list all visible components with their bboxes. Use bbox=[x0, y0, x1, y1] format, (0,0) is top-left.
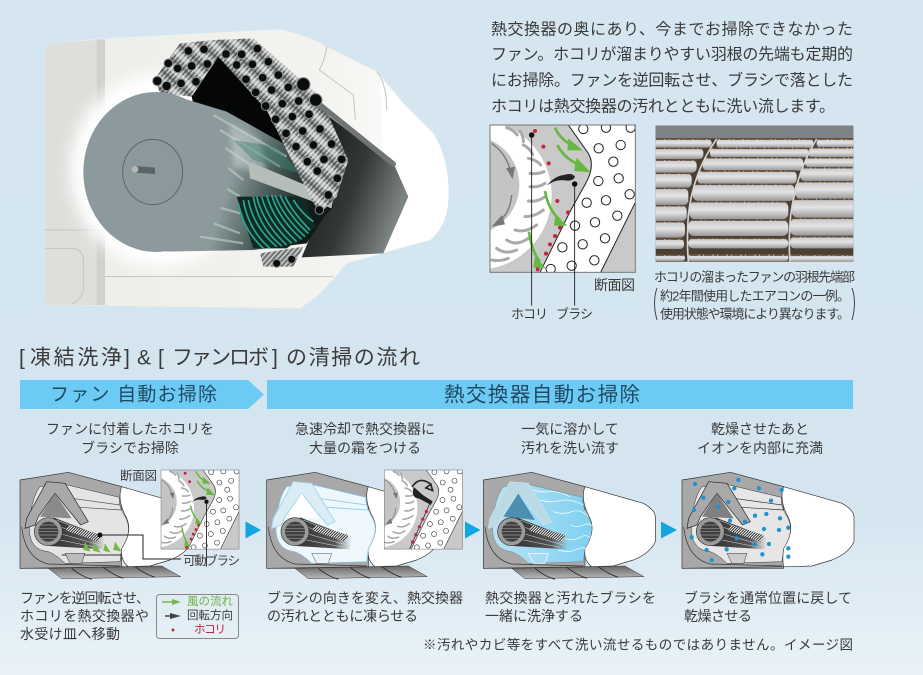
step headings: 大量の霜をつける bbox=[309, 440, 421, 456]
description text: ホコリは熱交換器の汚れとともに洗い流します。 bbox=[491, 98, 835, 116]
description text bbox=[491, 20, 853, 116]
banner: heat exchanger auto cleaning bbox=[267, 380, 853, 409]
step captions: ホコリを熱交換器や bbox=[20, 608, 149, 624]
section title: ] bbox=[272, 346, 278, 370]
step 1 labels and leader bbox=[98, 469, 240, 568]
banner: heat exchanger auto cleaning: 熱交換器自動お掃除 bbox=[444, 384, 640, 406]
step 4 illustration bbox=[682, 472, 854, 568]
cavity behind fan bbox=[192, 57, 333, 240]
legend: 回転方向 bbox=[187, 608, 233, 622]
banner: fan auto cleaning: ファン 自動お掃除 bbox=[50, 384, 217, 406]
step headings bbox=[46, 421, 823, 456]
photo caption: ホコリの溜まったファンの羽根先端部 bbox=[654, 270, 855, 284]
step captions bbox=[20, 590, 852, 642]
brush shape bbox=[547, 174, 575, 186]
diagram labels: ブラシ bbox=[556, 306, 593, 322]
diagram labels: ホコリ bbox=[511, 306, 548, 322]
description text: 熱交換器の奥にあり、今までお掃除できなかった bbox=[491, 20, 853, 38]
step 1 labels and leader: 断面図 bbox=[120, 469, 157, 483]
dust dots bbox=[533, 129, 570, 271]
step 1 section inset bbox=[114, 467, 239, 567]
movable brush bar bbox=[248, 163, 333, 208]
step headings: イオンを内部に充満 bbox=[697, 440, 823, 456]
step captions: ブラシの向きを変え、熱交換器 bbox=[267, 590, 463, 606]
ions bbox=[690, 478, 790, 562]
green brush bristles bbox=[238, 195, 313, 248]
step captions: ファンを逆回転させ、 bbox=[20, 590, 150, 606]
banner: fan auto cleaning bbox=[20, 380, 264, 409]
photo: dusty fan blades bbox=[647, 126, 860, 262]
heat exchanger with copper tubes bbox=[153, 38, 393, 267]
step 1 labels and leader: 可動ブラシ bbox=[183, 553, 240, 568]
section title: ] bbox=[124, 346, 130, 370]
step captions: ブラシを通常位置に戻して bbox=[684, 590, 852, 606]
photo caption: 使用状態や環境により異なります。 bbox=[660, 306, 850, 322]
unit casing bbox=[45, 29, 448, 308]
step headings: 汚れを洗い流す bbox=[521, 440, 619, 456]
step captions: の汚れとともに凍らせる bbox=[267, 608, 418, 624]
step headings: ブラシでお掃除 bbox=[81, 440, 179, 456]
section title: ファンロボ bbox=[172, 346, 269, 370]
fan end disk and shaft bbox=[83, 92, 229, 252]
arrow 2 bbox=[465, 522, 480, 538]
step 2 section inset bbox=[337, 467, 462, 550]
legend: 風の流れ bbox=[187, 595, 234, 608]
cross-flow fan cylinder bbox=[167, 93, 333, 252]
diagram labels bbox=[511, 277, 635, 322]
section title bbox=[19, 346, 420, 370]
step captions: 熱交換器と汚れたブラシを bbox=[485, 590, 656, 606]
hero illustration: air conditioner cutaway bbox=[45, 29, 448, 308]
photo caption: 約2年間使用したエアコンの一例。 bbox=[660, 288, 850, 304]
cross-section diagram bbox=[402, 120, 635, 306]
arrow 3 bbox=[661, 522, 677, 538]
step headings: 一気に溶かして bbox=[521, 421, 619, 437]
arrow 1 bbox=[246, 522, 261, 538]
airflow arrows bbox=[83, 542, 122, 553]
step captions: 一緒に洗浄する bbox=[485, 608, 583, 624]
step captions: 水受け皿へ移動 bbox=[20, 626, 120, 642]
step captions: 乾燥させる bbox=[684, 608, 752, 624]
section title: & bbox=[137, 346, 151, 370]
step 3 illustration bbox=[483, 472, 655, 579]
rear dark chassis bbox=[302, 113, 408, 257]
step 1 illustration bbox=[20, 472, 192, 579]
legend bbox=[156, 594, 238, 638]
description text: にお掃除。ファンを逆回転させ、ブラシで落とした bbox=[491, 70, 853, 90]
section title: 凍結洗浄 bbox=[30, 346, 122, 370]
section title: の清掃の流れ bbox=[286, 346, 420, 370]
step headings: ファンに付着したホコリを bbox=[46, 421, 214, 437]
step 2 illustration bbox=[267, 472, 439, 579]
section title: [ bbox=[158, 346, 164, 370]
footnote: ※汚れやカビ等をすべて洗い流せるものではありません。イメージ図 bbox=[423, 636, 853, 652]
description text: ファン。ホコリが溜まりやすい羽根の先端も定期的 bbox=[491, 46, 853, 64]
leader lines bbox=[529, 133, 577, 306]
section title: [ bbox=[19, 346, 25, 370]
legend: ホコリ bbox=[194, 623, 226, 636]
water ripples bbox=[533, 490, 595, 552]
step headings: 急速冷却で熱交換器に bbox=[295, 421, 435, 437]
step headings: 乾燥させたあと bbox=[711, 421, 809, 437]
diagram labels: 断面図 bbox=[594, 277, 635, 293]
photo caption bbox=[654, 270, 855, 322]
